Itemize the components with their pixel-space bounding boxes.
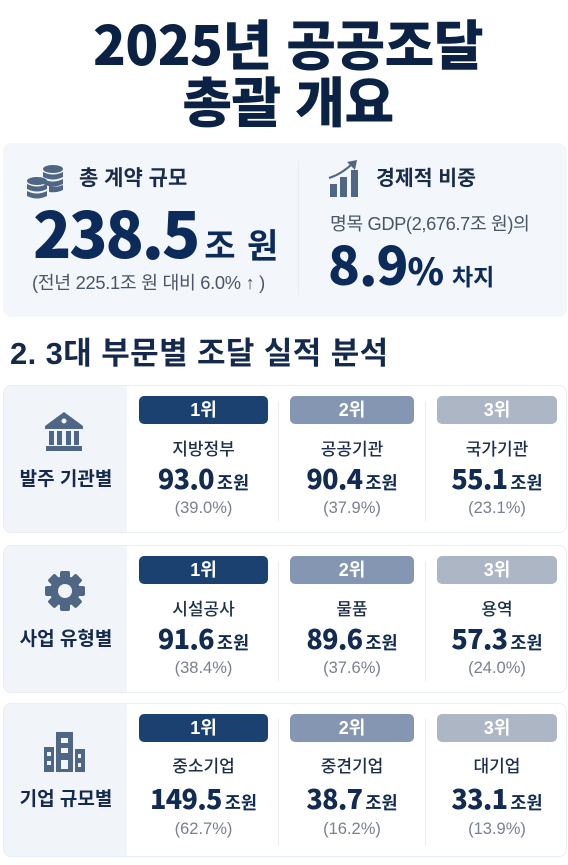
divider — [425, 401, 426, 521]
share: (13.9%) — [468, 820, 526, 838]
rank 3 — [437, 714, 557, 838]
icon: growth chart — [328, 160, 358, 197]
badge — [290, 396, 414, 424]
text: year over year: (전년 225.1조 원 대비 6.0% ↑ ) — [32, 272, 265, 293]
panel: by company size — [3, 703, 567, 857]
name: 용역 — [481, 600, 513, 619]
name: 시설공사 — [172, 600, 235, 619]
badge — [139, 556, 268, 584]
badge: 2위 — [339, 400, 365, 420]
badge — [139, 714, 268, 742]
rank 3 — [437, 556, 557, 677]
category column — [4, 546, 127, 692]
category column — [4, 386, 127, 532]
panel: by project type — [3, 545, 567, 693]
title: 2025년 공공조달 — [93, 2, 483, 81]
badge — [437, 556, 557, 584]
share: (37.9%) — [323, 499, 381, 517]
value: 91.6조원 — [158, 618, 249, 657]
rank 1 — [139, 396, 268, 517]
title — [93, 2, 483, 138]
name: 국가기관 — [466, 440, 528, 459]
value: 89.6조원 — [306, 618, 398, 657]
name: 중소기업 — [172, 757, 235, 776]
divider — [425, 561, 426, 681]
divider — [298, 161, 299, 295]
divider — [278, 719, 279, 845]
figure: GDP share: 8.9% 차지 — [328, 225, 494, 301]
share: (23.1%) — [468, 499, 526, 517]
badge — [437, 396, 557, 424]
rank 2 — [290, 556, 414, 677]
share: (37.6%) — [323, 659, 381, 677]
value: 55.1조원 — [451, 458, 543, 497]
heading: economic share: 경제적 비중 — [376, 167, 476, 190]
badge — [437, 714, 557, 742]
value: 38.7조원 — [306, 778, 398, 817]
category column — [4, 704, 127, 856]
badge: 3위 — [484, 560, 510, 580]
divider — [278, 561, 279, 681]
badge — [139, 396, 268, 424]
rank 2 — [290, 714, 414, 838]
category label: 기업 규모별 — [20, 789, 112, 810]
badge: 3위 — [484, 718, 510, 738]
icon: buildings — [44, 732, 85, 772]
value: 33.1조원 — [451, 778, 543, 817]
badge — [290, 556, 414, 584]
title: 총괄 개요 — [182, 59, 394, 138]
rank 2 — [290, 396, 414, 517]
share: (38.4%) — [175, 659, 232, 677]
divider — [278, 401, 279, 521]
name: 물품 — [336, 600, 368, 619]
name: 지방정부 — [172, 440, 235, 459]
badge — [290, 714, 414, 742]
icon: coins — [27, 165, 63, 198]
icon: gear — [45, 571, 85, 611]
heading: total contract: 총 계약 규모 — [79, 167, 187, 190]
rank 1 — [139, 714, 268, 838]
share: (16.2%) — [323, 820, 381, 838]
badge: 2위 — [339, 718, 365, 738]
rank 3 — [437, 396, 557, 517]
category label: 사업 유형별 — [20, 629, 112, 650]
share: (62.7%) — [175, 820, 232, 838]
value: 57.3조원 — [451, 618, 543, 657]
share: (24.0%) — [468, 659, 526, 677]
panel: by ordering agency — [3, 385, 567, 533]
category label: 발주 기관별 — [20, 469, 112, 490]
rank 1 — [139, 556, 268, 677]
badge: 3위 — [484, 400, 510, 420]
name: 중견기업 — [321, 757, 383, 776]
badge: 2위 — [339, 560, 365, 580]
panel: summary — [3, 143, 567, 317]
value: 90.4조원 — [306, 458, 398, 497]
badge: 1위 — [190, 400, 217, 420]
badge: 1위 — [190, 560, 217, 580]
figure: total amount: 238.5조 원 — [33, 186, 279, 277]
badge: 1위 — [190, 718, 217, 738]
share: (39.0%) — [175, 499, 232, 517]
text: nominal GDP: 명목 GDP(2,676.7조 원)의 — [330, 213, 529, 234]
name: 대기업 — [474, 757, 520, 776]
value: 93.0조원 — [158, 458, 249, 497]
icon: institution — [45, 412, 83, 451]
name: 공공기관 — [321, 440, 383, 459]
value: 149.5조원 — [150, 778, 257, 817]
divider — [425, 719, 426, 845]
section heading: 2. 3대 부문별 조달 실적 분석 — [10, 336, 389, 371]
